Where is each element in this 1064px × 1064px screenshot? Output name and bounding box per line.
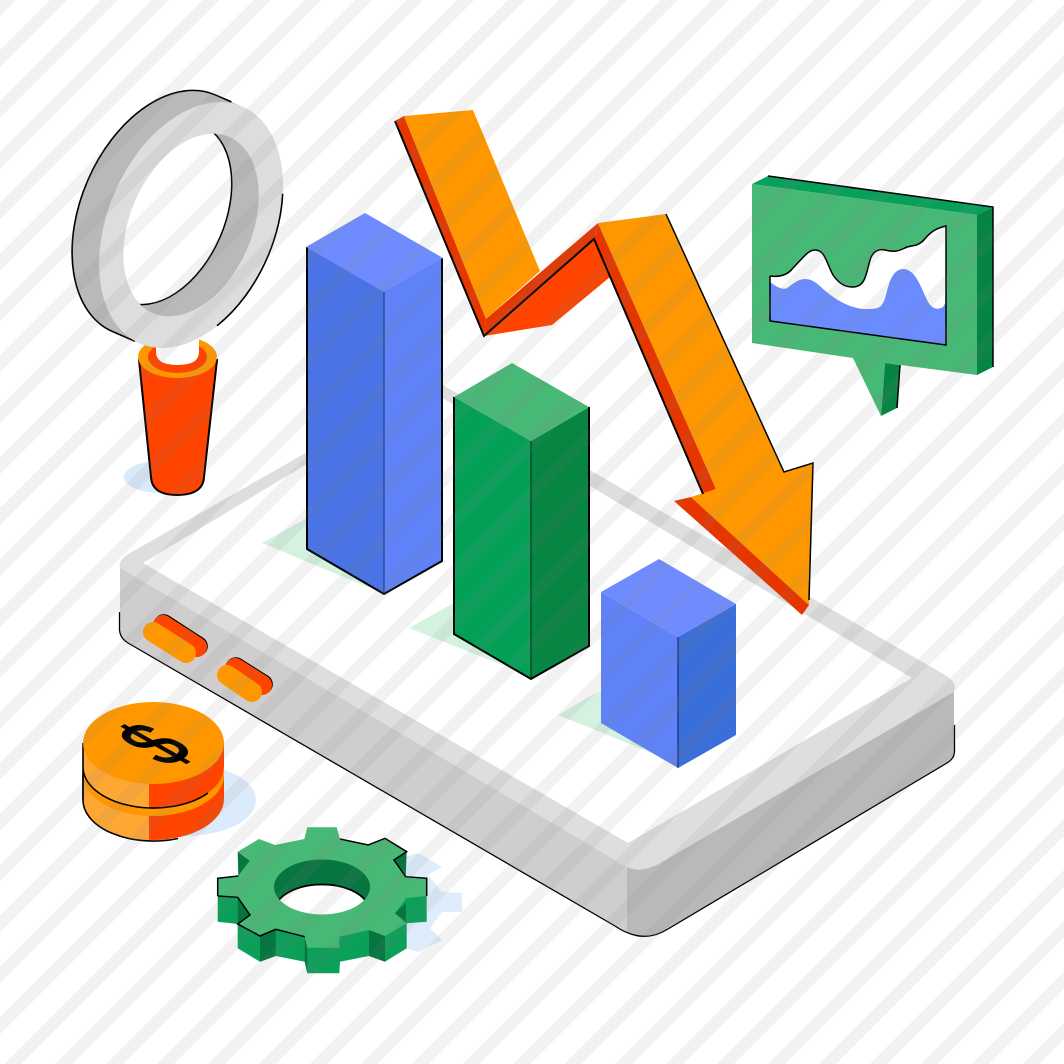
- bubble outlines: [768, 176, 993, 408]
- lower coin top: [83, 734, 224, 816]
- dollar coin stack: [83, 702, 224, 841]
- chart outline: [770, 226, 946, 345]
- arrow outlines: [395, 121, 703, 494]
- small blue bar: [601, 559, 736, 768]
- gear shadow: [395, 853, 462, 952]
- device tablet base: [120, 380, 955, 937]
- arrow underside: [484, 235, 610, 336]
- lower coin light side: [84, 781, 149, 840]
- gear hole wall: [274, 860, 370, 914]
- lens back silhouette: [36, 62, 319, 376]
- falling trend arrow: [395, 110, 813, 615]
- bubble tail side: [881, 363, 900, 416]
- tall blue bar: [306, 213, 443, 594]
- device left side face: [120, 566, 627, 933]
- magnifying glass lens: [71, 90, 284, 348]
- bubble top side: [752, 176, 993, 215]
- gear dark side facets: [238, 852, 407, 973]
- magnifying glass shadow: [124, 461, 196, 493]
- device right side face: [627, 690, 954, 937]
- device screen: [143, 390, 912, 843]
- upper coin body: [83, 743, 224, 808]
- device bottom outline: [120, 612, 954, 936]
- gear top face: [218, 827, 427, 948]
- lens right outline: [217, 191, 293, 333]
- coin outlines: [83, 743, 208, 808]
- lens inner wall: [97, 113, 285, 337]
- settings gear: [218, 827, 427, 973]
- arrow orange first segment: [404, 110, 540, 319]
- gear hole window: [278, 884, 366, 914]
- device button 2: [227, 667, 263, 692]
- magnifying glass handle: [138, 335, 217, 495]
- upper coin light side: [84, 748, 149, 808]
- gear body sides: [218, 880, 427, 973]
- chart white area: [770, 226, 946, 345]
- device button 1: [153, 624, 198, 653]
- bubble right side: [977, 207, 993, 375]
- lower coin body: [83, 775, 224, 840]
- chart blue area: [770, 269, 946, 345]
- dollar sign: $: [97, 711, 213, 777]
- bubble front: [752, 184, 977, 416]
- arrow red sides: [395, 116, 809, 615]
- bar shadows on the screen: [262, 518, 662, 757]
- arrow orange second segment and head: [598, 214, 813, 605]
- gear outlines: [218, 838, 427, 937]
- upper coin top: [83, 702, 224, 784]
- device top surface: [120, 380, 955, 870]
- lower coin outline: [83, 775, 178, 841]
- coin shadow: [116, 764, 256, 836]
- lens front ring: [63, 74, 319, 376]
- green bar: [454, 363, 589, 679]
- lens left outline: [36, 62, 238, 341]
- speech bubble with area chart: [752, 176, 993, 416]
- lens window: [123, 134, 232, 306]
